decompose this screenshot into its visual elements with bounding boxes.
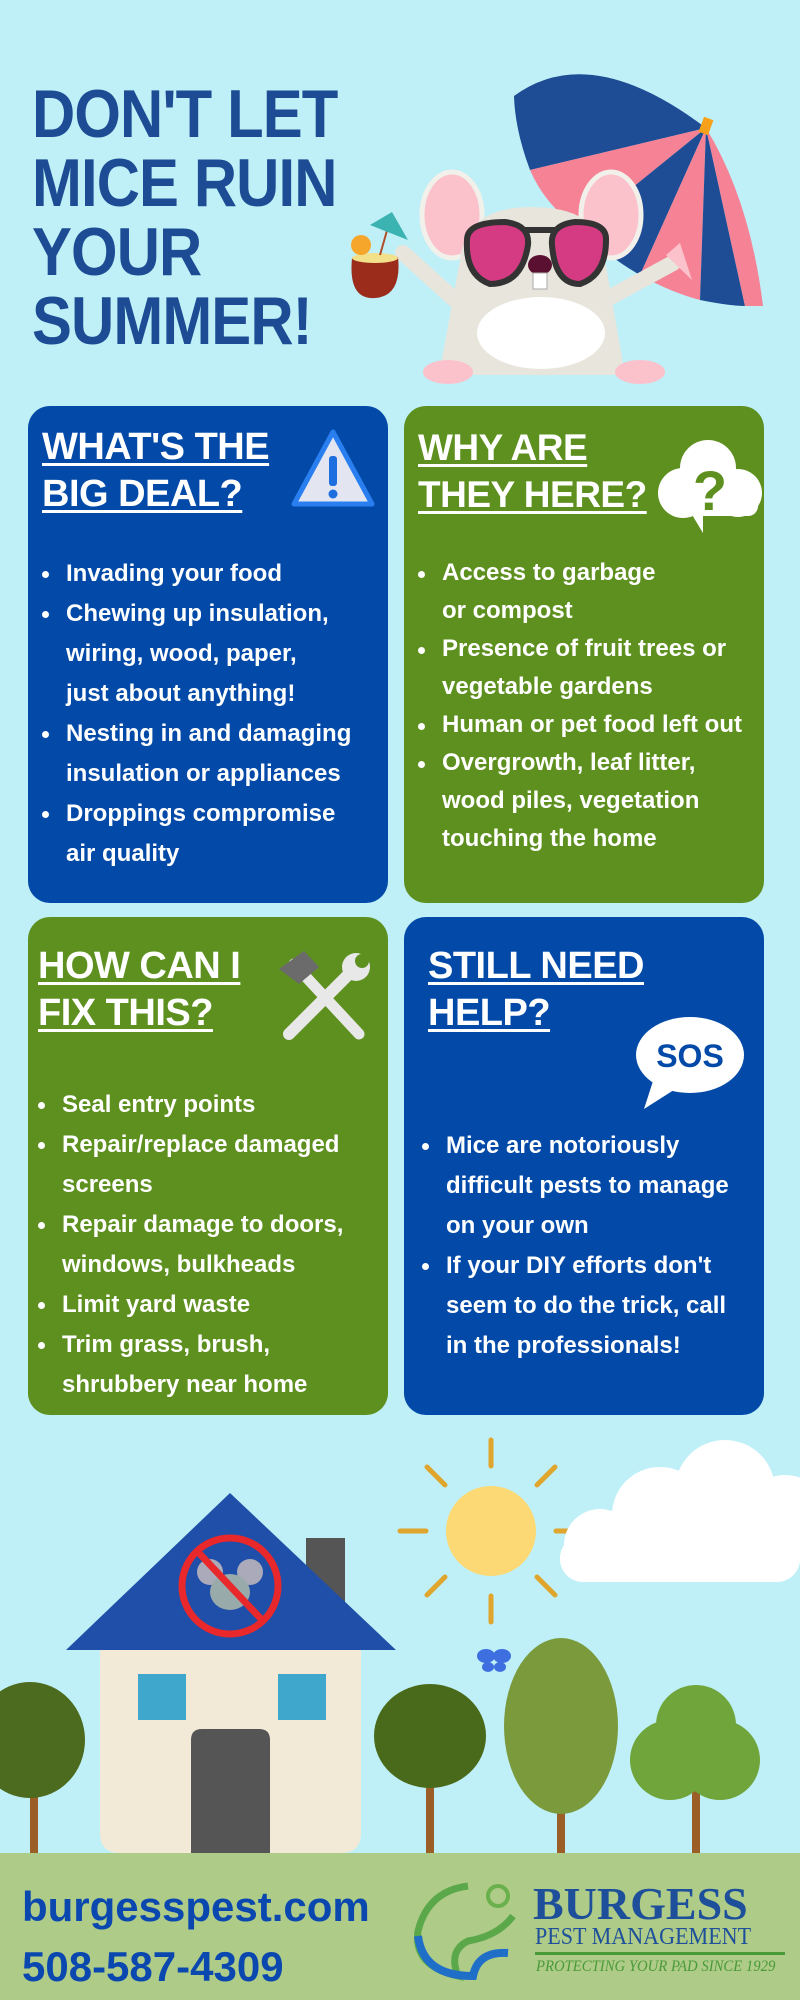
contact text: burgesspest.com bbox=[22, 1883, 370, 1930]
umbrella bbox=[514, 74, 763, 306]
bullet list: on your own bbox=[446, 1212, 589, 1239]
panel: what's the big deal bbox=[28, 406, 388, 903]
logo: PROTECTING YOUR PAD SINCE 1929 bbox=[536, 1958, 775, 1975]
heading: WHY ARE bbox=[418, 427, 587, 468]
coconut drink bbox=[351, 212, 408, 298]
heading: THEY HERE? bbox=[418, 474, 647, 515]
heading: HOW CAN I bbox=[38, 945, 240, 987]
bullet list: Repair/replace damaged bbox=[62, 1131, 339, 1158]
illustration: scene bbox=[0, 1438, 800, 1853]
title: YOUR bbox=[32, 214, 201, 290]
illustration: mouse with umbrella bbox=[351, 74, 763, 384]
bullet list: Invading your food bbox=[66, 560, 282, 587]
bullet list: vegetable gardens bbox=[442, 673, 653, 700]
logo: PEST MANAGEMENT bbox=[535, 1924, 751, 1950]
heading: WHAT'S THE bbox=[42, 426, 269, 468]
bullet list: Overgrowth, leaf litter, bbox=[442, 749, 695, 776]
bullet list: Limit yard waste bbox=[62, 1291, 250, 1318]
bullet list: Droppings compromise bbox=[66, 800, 335, 827]
bullet list bbox=[422, 1132, 729, 1359]
bullet list: Repair damage to doors, bbox=[62, 1211, 343, 1238]
butterfly bbox=[477, 1649, 511, 1672]
icon: tools bbox=[279, 951, 370, 1040]
mouse bbox=[403, 172, 692, 384]
panel: still need help bbox=[404, 917, 764, 1415]
contact text bbox=[22, 1883, 370, 1990]
bullet list: Access to garbage bbox=[442, 559, 655, 586]
footer band bbox=[0, 1853, 800, 2000]
title: DON'T LET bbox=[32, 76, 337, 152]
bullet list: Nesting in and damaging bbox=[66, 720, 351, 747]
heading: HELP? bbox=[428, 992, 550, 1034]
panel: how can i fix this bbox=[28, 917, 388, 1415]
bullet list: screens bbox=[62, 1171, 153, 1198]
icon: SOS bubble bbox=[636, 1017, 744, 1109]
bullet list: difficult pests to manage bbox=[446, 1172, 729, 1199]
icon: SOS bubble: SOS bbox=[656, 1038, 724, 1074]
bullet list: wiring, wood, paper, bbox=[66, 640, 297, 667]
bullet list: Presence of fruit trees or bbox=[442, 635, 726, 662]
bullet list: windows, bulkheads bbox=[62, 1251, 295, 1278]
heading bbox=[418, 427, 647, 515]
bullet list: wood piles, vegetation bbox=[442, 787, 699, 814]
icon: question cloud: ? bbox=[693, 459, 727, 522]
bullet list: just about anything! bbox=[66, 680, 295, 707]
icon: warning bbox=[292, 430, 374, 506]
bullet list: in the professionals! bbox=[446, 1332, 681, 1359]
bullet list: air quality bbox=[66, 840, 179, 867]
icon: question cloud bbox=[658, 440, 762, 533]
heading bbox=[428, 945, 644, 1034]
contact text: 508-587-4309 bbox=[22, 1943, 284, 1990]
bullet list: seem to do the trick, call bbox=[446, 1292, 726, 1319]
bullet list: Seal entry points bbox=[62, 1091, 255, 1118]
bullet list: Human or pet food left out bbox=[442, 711, 742, 738]
bullet list: Mice are notoriously bbox=[446, 1132, 679, 1159]
title: SUMMER! bbox=[32, 283, 312, 359]
bullet list: touching the home bbox=[442, 825, 657, 852]
bullet list: insulation or appliances bbox=[66, 760, 341, 787]
bullet list: shrubbery near home bbox=[62, 1371, 307, 1398]
bullet list: If your DIY efforts don't bbox=[446, 1252, 711, 1279]
heading bbox=[42, 426, 270, 515]
panel: why are they here bbox=[404, 406, 764, 903]
sun bbox=[400, 1440, 582, 1622]
logo bbox=[414, 1878, 785, 1981]
heading: FIX THIS? bbox=[38, 992, 213, 1034]
heading bbox=[38, 945, 240, 1034]
bullet list bbox=[418, 559, 742, 852]
bullet list: Chewing up insulation, bbox=[66, 600, 329, 627]
logo: BURGESS bbox=[533, 1878, 748, 1929]
title: MICE RUIN bbox=[32, 145, 337, 221]
heading: STILL NEED bbox=[428, 945, 644, 987]
bullet list bbox=[42, 560, 351, 867]
icon: no mice sign bbox=[182, 1538, 278, 1634]
bullet list bbox=[38, 1091, 343, 1398]
heading: BIG DEAL? bbox=[42, 473, 242, 515]
house bbox=[66, 1493, 396, 1853]
bullet list: or compost bbox=[442, 597, 573, 624]
bullet list: Trim grass, brush, bbox=[62, 1331, 270, 1358]
title bbox=[32, 76, 338, 359]
cloud bbox=[560, 1440, 800, 1582]
trees bbox=[0, 1638, 760, 1860]
